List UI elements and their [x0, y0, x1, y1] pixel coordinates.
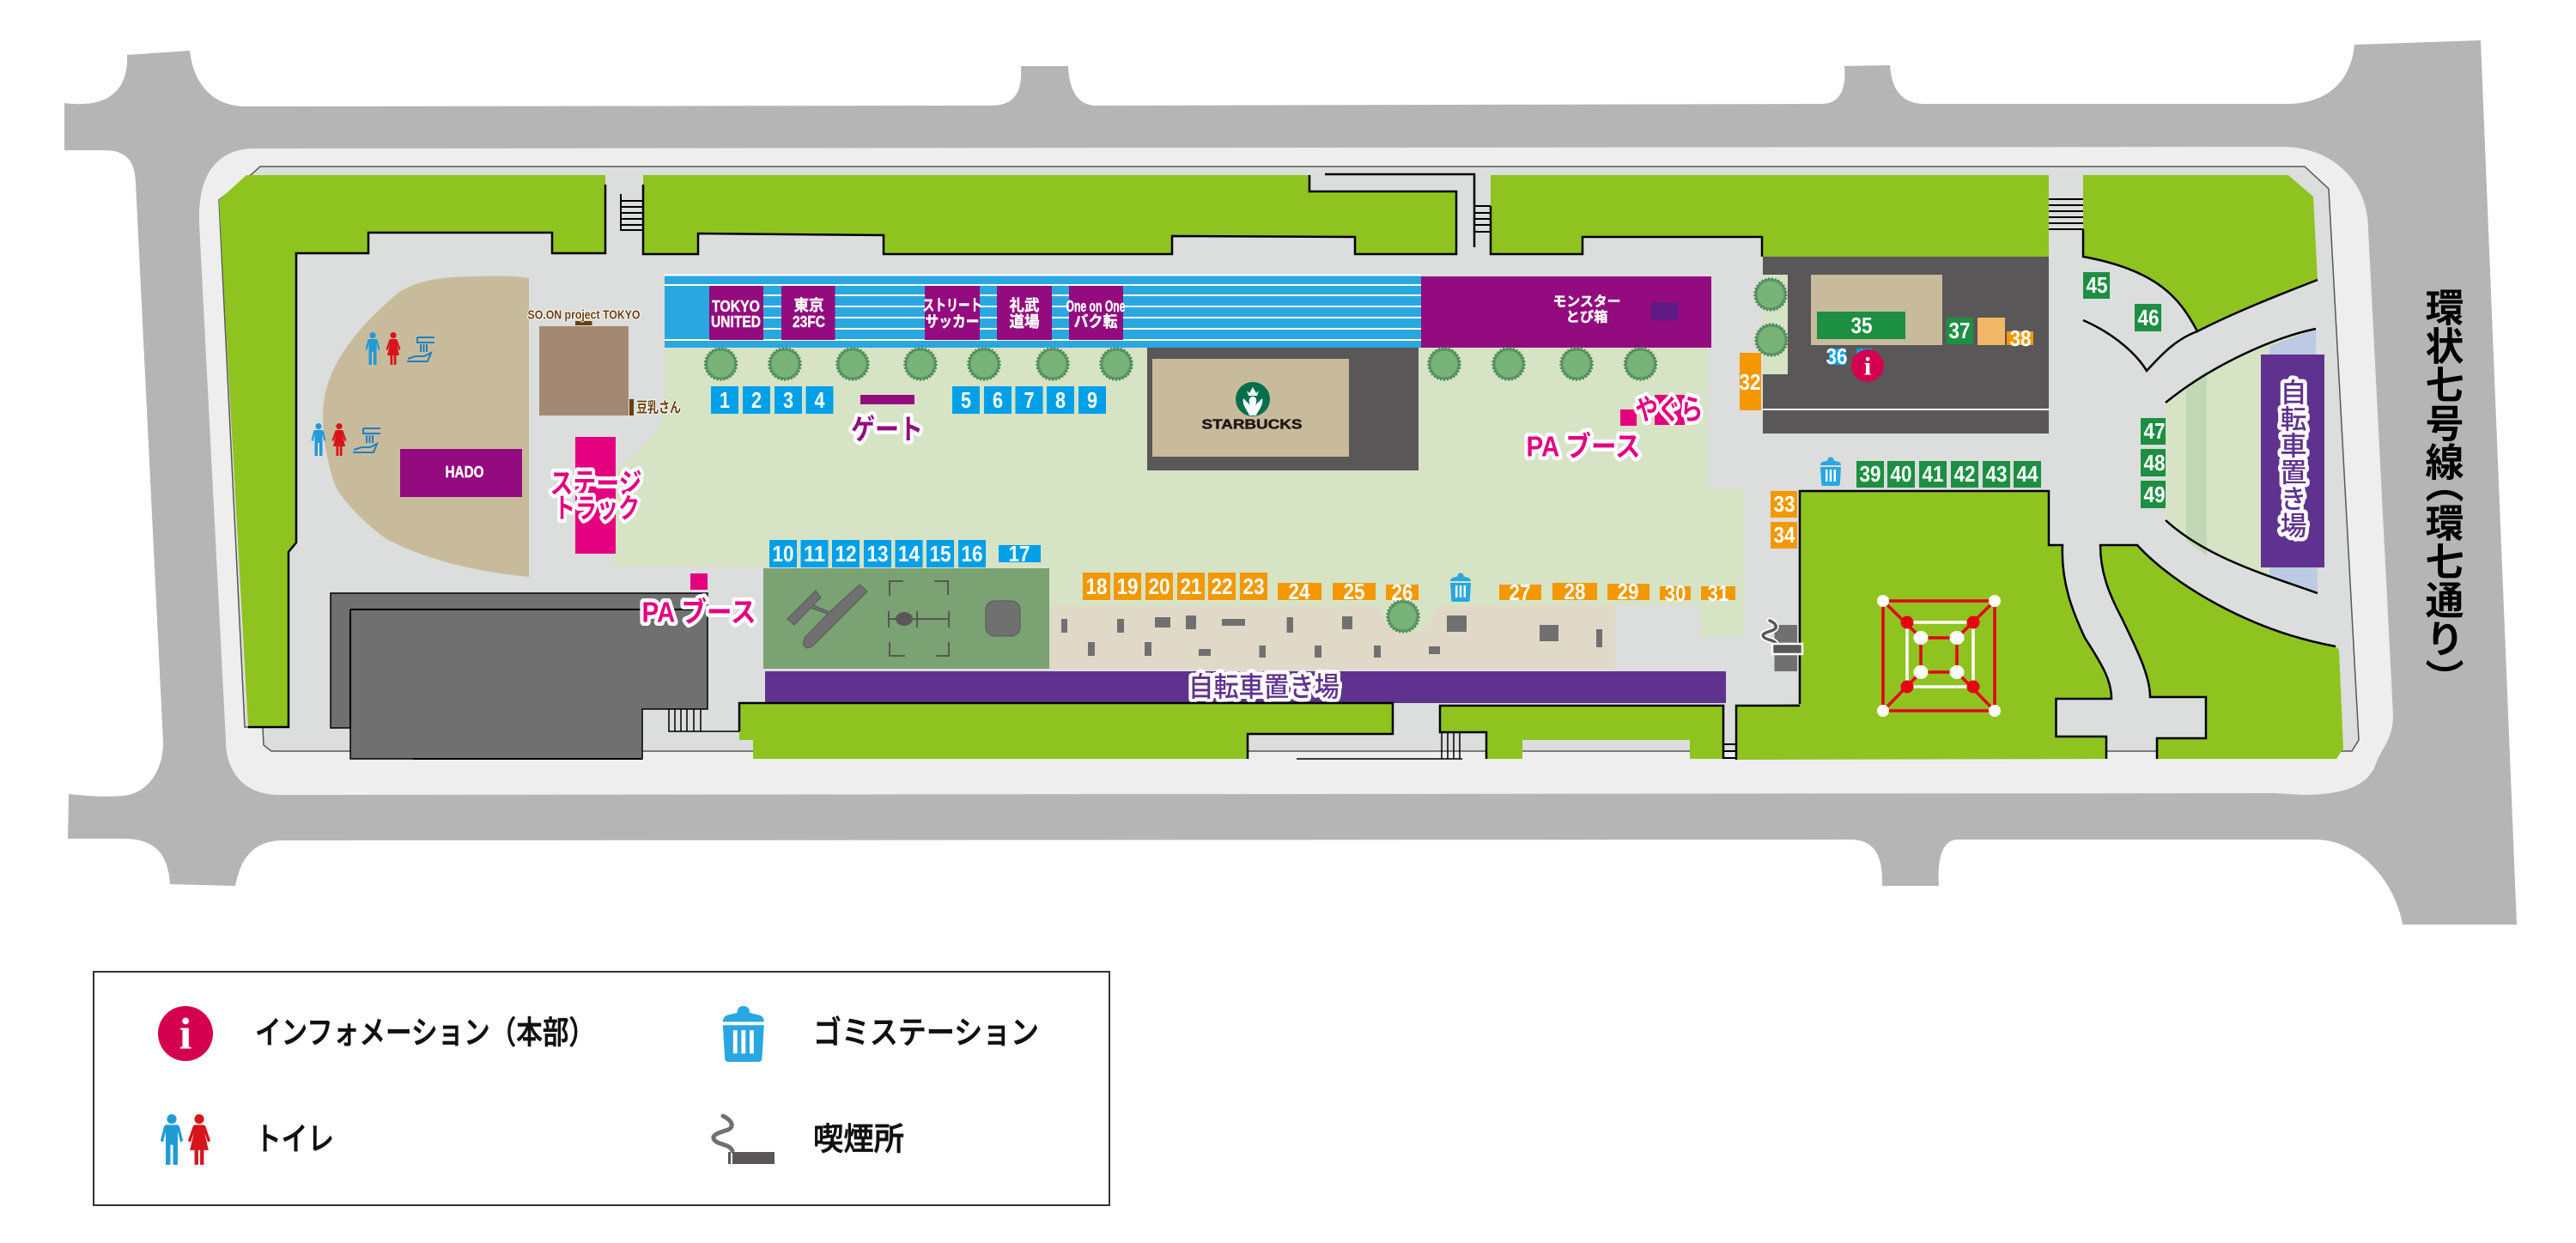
booth street soccer	[922, 286, 982, 340]
stall 36: 36	[1826, 343, 1848, 369]
stairs north 3	[2049, 199, 2083, 229]
Starbucks building: STARBUCKS	[1202, 417, 1303, 433]
stall 30: 30	[1664, 580, 1686, 606]
booth one on one back flip	[1066, 286, 1125, 340]
east headquarters building	[1755, 257, 2049, 434]
stall 7	[1015, 386, 1042, 414]
stall 37: 37	[1949, 318, 1970, 343]
stall 43: 43	[1985, 461, 2008, 487]
booth Tokyo 23FC	[781, 286, 835, 340]
legend information: i	[179, 1010, 191, 1059]
booth monster vaulting box	[1421, 276, 1711, 348]
stall 29: 29	[1618, 579, 1638, 604]
southeast lawn	[2100, 545, 2343, 759]
trees along track	[705, 349, 1656, 379]
west PA booth	[690, 573, 708, 590]
smoking area	[1763, 621, 1802, 671]
stall 9	[1078, 386, 1106, 414]
stall 32: 32	[1740, 369, 1760, 395]
stall 19: 19	[1116, 573, 1139, 599]
Starbucks building	[1147, 348, 1419, 470]
stall 44: 44	[2016, 461, 2038, 487]
sidewalk	[199, 147, 2393, 795]
stall 4: 4	[814, 387, 825, 413]
legend information	[158, 1006, 595, 1061]
info marker	[1851, 349, 1884, 382]
stall 24	[1278, 579, 1321, 604]
north west lawn	[219, 175, 605, 727]
stall 1	[711, 386, 738, 414]
stall 5: 5	[961, 387, 971, 413]
soy milk stand	[629, 399, 681, 415]
stall 47: 47	[2143, 418, 2166, 444]
stall 18: 18	[1085, 573, 1108, 599]
road name label: ）	[2420, 658, 2464, 697]
stall 38: 38	[2009, 325, 2032, 351]
stall 34: 34	[1774, 522, 1795, 548]
stall 2: 2	[751, 387, 762, 413]
stage truck	[550, 437, 642, 554]
booth Tokyo 23FC: 23FC	[793, 313, 825, 330]
stall 11: 11	[804, 541, 825, 567]
booth street soccer: ストリート	[922, 297, 982, 314]
stall 9: 9	[1087, 387, 1097, 413]
booth monster vaulting box: とび箱	[1566, 309, 1607, 324]
stairs north 2	[1474, 206, 1491, 232]
stall 16: 16	[962, 541, 982, 567]
south central lawn	[739, 703, 1393, 759]
stall 4	[805, 386, 833, 414]
stall 36	[1826, 343, 1872, 369]
stall 8	[1047, 386, 1074, 414]
beige seating zone	[1049, 601, 1615, 670]
yagura tower booth	[1620, 393, 1704, 426]
stage truck: トラック	[554, 493, 640, 524]
stall 22: 22	[1211, 573, 1233, 599]
stall 35	[1817, 312, 1905, 339]
purple bicycle parking east: 自転車置き場	[2275, 379, 2306, 538]
purple bicycle parking east	[2261, 355, 2324, 567]
lawn area	[614, 348, 1745, 637]
gate	[851, 395, 923, 445]
east garden crescent	[2166, 329, 2318, 593]
legend trash	[723, 1006, 1039, 1062]
road name label: 環七通り	[2420, 503, 2464, 658]
stall 48: 48	[2143, 450, 2166, 476]
corner lawn northeast	[2083, 175, 2318, 331]
stall 31: 31	[1707, 580, 1729, 606]
north east lawn	[1491, 175, 2049, 257]
booth TOKYO UNITED	[709, 286, 763, 340]
legend panel	[94, 972, 1109, 1205]
trash bin lawn	[1450, 573, 1471, 602]
stall 27: 27	[1510, 579, 1530, 605]
stall 17	[999, 541, 1041, 567]
south east small lawn	[1440, 706, 1723, 759]
stall 25: 25	[1343, 579, 1365, 604]
legend toilet: トイレ	[255, 1121, 334, 1157]
stall 12: 12	[835, 541, 857, 567]
road name label	[2420, 288, 2464, 697]
stall 45: 45	[2087, 272, 2107, 298]
booth one on one back flip: One on One	[1066, 298, 1125, 315]
stall 8: 8	[1055, 387, 1066, 413]
tan ground west	[323, 276, 529, 577]
dark green exhibit zone	[763, 568, 1049, 669]
booth monster vaulting box: モンスター	[1552, 294, 1621, 309]
stall 10: 10	[773, 541, 793, 567]
stall 40: 40	[1891, 461, 1911, 487]
west PA booth label: PA ブース	[642, 596, 756, 628]
stall 17: 17	[1008, 541, 1030, 567]
north central lawn	[643, 174, 1474, 254]
red tower	[1877, 595, 2001, 717]
main lawn with tower	[1736, 491, 2111, 760]
stall 13: 13	[867, 541, 888, 567]
stall 2	[743, 386, 770, 414]
stall 15: 15	[929, 541, 951, 567]
stall 26: 26	[1391, 579, 1413, 605]
legend trash: ゴミステーション	[813, 1015, 1039, 1051]
booth reibu dojo: 道場	[1010, 313, 1039, 330]
legend toilet	[161, 1114, 334, 1165]
stall 21: 21	[1180, 573, 1202, 599]
stall 33: 33	[1774, 491, 1795, 517]
stall 6: 6	[993, 387, 1003, 413]
info marker: i	[1864, 352, 1871, 381]
stall 46: 46	[2138, 305, 2159, 330]
toilets group south	[311, 423, 380, 456]
soy milk stand: 豆乳さん	[636, 400, 681, 415]
stairs southwest	[669, 703, 739, 731]
stall 24: 24	[1288, 579, 1310, 604]
HADO booth: HADO	[445, 464, 484, 481]
stall 32	[1740, 353, 1761, 410]
stairs south	[1297, 732, 1462, 759]
running track	[665, 275, 1421, 348]
stall 27	[1499, 579, 1541, 605]
stall 39: 39	[1860, 461, 1880, 487]
SO.ON booth: SO.ON project TOKYO	[527, 307, 641, 323]
road network	[64, 40, 2517, 925]
stall 14: 14	[898, 541, 920, 567]
paths lines northeast	[2083, 320, 2197, 371]
booth reibu dojo	[997, 286, 1052, 340]
stall 23: 23	[1243, 573, 1264, 599]
trash bin east	[1820, 457, 1841, 486]
stairs north 1	[621, 194, 643, 230]
stall 29	[1607, 579, 1649, 604]
legend smoking	[714, 1116, 904, 1164]
stall 1: 1	[720, 387, 730, 413]
booth reibu dojo: 礼武	[1010, 297, 1039, 314]
stall 7: 7	[1024, 387, 1034, 413]
road name label: （	[2420, 464, 2464, 503]
stall 42: 42	[1954, 461, 1975, 487]
booth TOKYO UNITED: UNITED	[711, 313, 761, 330]
booth TOKYO UNITED: TOKYO	[712, 298, 760, 315]
booth Tokyo 23FC: 東京	[793, 297, 824, 314]
SO.ON booth	[527, 307, 641, 415]
stall 28	[1552, 579, 1597, 604]
plaza ground	[219, 167, 2359, 751]
west building	[331, 593, 708, 759]
stall 3	[775, 386, 802, 414]
stall 28: 28	[1564, 579, 1585, 604]
legend smoking: 喫煙所	[813, 1121, 904, 1157]
stall 3: 3	[783, 387, 793, 413]
booth one on one back flip: バク転	[1073, 313, 1118, 330]
purple bicycle parking south: 自転車置き場	[1188, 671, 1340, 702]
stage truck: ステージ	[550, 467, 642, 500]
stall 35: 35	[1851, 312, 1872, 338]
yagura tower booth: やぐら	[1635, 393, 1704, 426]
booth street soccer: サッカー	[926, 313, 979, 330]
legend information: インフォメーション（本部）	[255, 1015, 595, 1051]
stall 41: 41	[1922, 461, 1944, 487]
gate: ゲート	[851, 414, 923, 445]
purple bicycle parking south	[765, 671, 1726, 703]
HADO booth	[400, 449, 522, 497]
stall 20: 20	[1149, 573, 1170, 599]
stall 6	[984, 386, 1012, 414]
toilets group north	[366, 332, 434, 365]
stall 25	[1333, 579, 1376, 604]
stairs southeast	[1723, 744, 1736, 758]
east PA booth label: PA ブース	[1527, 431, 1640, 462]
stall 49: 49	[2143, 482, 2166, 507]
road name label: 環状七号線	[2420, 288, 2464, 481]
stall 5	[952, 386, 980, 414]
